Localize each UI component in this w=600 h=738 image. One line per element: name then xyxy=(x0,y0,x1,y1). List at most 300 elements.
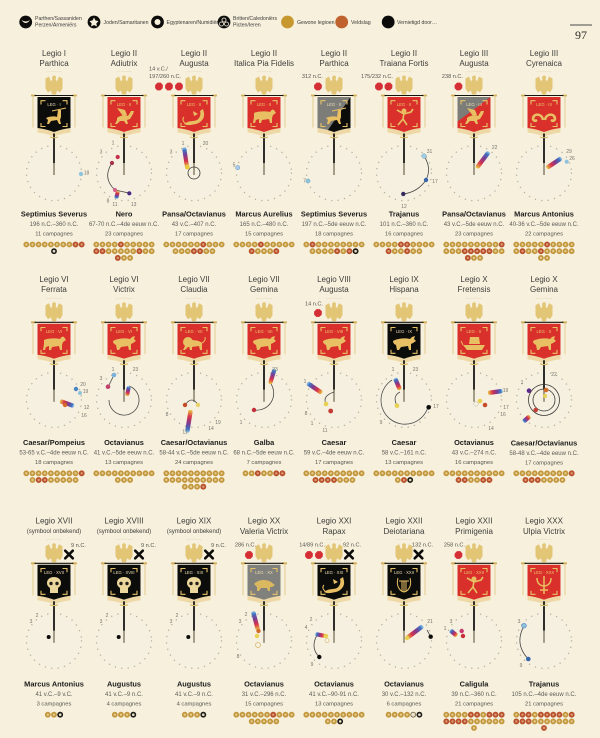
medals xyxy=(185,712,206,718)
heading: Legio II xyxy=(321,49,347,58)
dial: 13 xyxy=(131,202,137,208)
legion: Legio XXII Deiotariana xyxy=(376,516,434,718)
medals xyxy=(166,473,222,490)
dial: 2 xyxy=(245,612,248,618)
medals xyxy=(389,712,422,718)
standard: LEG · II xyxy=(327,102,341,107)
dial: 12 xyxy=(84,405,89,411)
heading: Legio XXX xyxy=(525,516,564,526)
standard xyxy=(446,298,502,427)
emperor: Caesar/Octavianus xyxy=(161,438,227,447)
dates: 16 campagnes xyxy=(385,232,423,238)
standard xyxy=(446,71,502,201)
dial: 2 xyxy=(106,613,109,619)
dial: 1 xyxy=(392,367,395,373)
dates: 31 v.C.–296 n.C. xyxy=(242,692,287,698)
loss markers: 175/232 n.C. xyxy=(361,74,393,80)
dial xyxy=(30,613,51,639)
legion: Legio XXX Ulpia Victrix xyxy=(512,516,577,731)
heading: Legio XVIII xyxy=(104,516,144,526)
legion: Legio VI Victrix xyxy=(94,275,155,480)
standard: LEG · XVIII xyxy=(113,570,135,575)
dates: 21 campagnes xyxy=(455,702,493,708)
dates: 21 campagnes xyxy=(525,702,563,708)
dates: 43 v.C.–5de eeuw n.C. xyxy=(444,222,505,228)
standard xyxy=(166,71,222,201)
standard xyxy=(96,298,152,427)
dial: 3 xyxy=(100,376,103,382)
dates: 16 campagnes xyxy=(455,460,493,466)
dial: 23 xyxy=(413,367,418,373)
legion: Legio I Parthica xyxy=(21,49,89,254)
legion: Legio XX Valeria Victrix xyxy=(235,516,292,721)
medals xyxy=(166,242,222,254)
dial: 5 xyxy=(233,162,236,168)
dates: 13 campagnes xyxy=(105,460,143,466)
heading: Legio II xyxy=(391,49,417,58)
dial: 3 xyxy=(30,619,33,625)
legend item: gold: Gewone legioen xyxy=(297,20,335,26)
standard xyxy=(516,71,572,201)
standard xyxy=(376,298,432,427)
standard: LEG · VI xyxy=(116,329,132,334)
medals xyxy=(516,242,572,258)
standard xyxy=(376,539,432,668)
dial xyxy=(545,149,575,170)
heading: Legio XX xyxy=(248,516,281,526)
dial: 3 xyxy=(170,150,173,156)
loss marker xyxy=(205,543,226,558)
loss markers xyxy=(361,74,393,90)
heading: Adiutrix xyxy=(111,59,137,68)
standard: LEG · I xyxy=(47,102,61,107)
legion: Legio VI Ferrata xyxy=(19,275,89,483)
dial: 17 xyxy=(433,404,439,410)
standard: LEG · XXII xyxy=(464,570,484,575)
dial xyxy=(170,613,190,639)
dial: 4 xyxy=(305,625,308,631)
dates: 101 n.C.–360 n.C. xyxy=(380,222,429,228)
dial: 8 xyxy=(237,654,240,660)
heading: Legio X xyxy=(530,275,558,284)
emperor: Septimius Severus xyxy=(301,210,367,218)
dates: 41 v.C.–9 v.C. xyxy=(35,692,73,698)
dates: 3 campagnes xyxy=(37,702,71,708)
medals xyxy=(443,712,505,728)
standard: LEG · XVII xyxy=(44,570,64,575)
dates: 196 n.C.–360 n.C. xyxy=(30,222,79,228)
loss marker xyxy=(412,542,434,558)
dial xyxy=(521,372,560,424)
standard: LEG · III xyxy=(466,102,482,107)
dial: 21 xyxy=(427,619,433,625)
dates: 40-36 v.C.–5de eeuw n.C. xyxy=(509,222,579,228)
page number xyxy=(570,25,592,42)
heading: Legio VII xyxy=(248,275,280,284)
legion: Legio XXII Primigenia xyxy=(443,516,505,728)
standard xyxy=(96,539,152,668)
medals xyxy=(26,470,85,483)
legend item: Britons: Picten/Ieren xyxy=(233,22,261,28)
dial: 2 xyxy=(176,613,179,619)
standard xyxy=(26,298,82,427)
medals xyxy=(306,715,362,724)
dial: 16 xyxy=(500,412,506,418)
emperor: Septimius Severus xyxy=(21,210,87,218)
dates: 58-44 v.C.–5de eeuw n.C. xyxy=(159,450,229,456)
dial: 3 xyxy=(450,619,453,625)
medals xyxy=(96,473,152,480)
legion: Legio IX Hispana xyxy=(376,275,439,483)
medals xyxy=(513,712,575,731)
dial: 18 xyxy=(84,170,89,176)
medals xyxy=(376,473,432,483)
legion: Legio II Italica xyxy=(233,49,294,254)
legion: Legio X Fretensis xyxy=(446,275,509,483)
dates: 39 n.C.–360 n.C. xyxy=(451,692,497,698)
legion: Legio XVIII xyxy=(96,516,156,718)
emperor: Octavianus xyxy=(384,680,424,688)
dial xyxy=(100,140,137,208)
emperor: Galba xyxy=(254,438,275,447)
dial: 19 xyxy=(83,389,88,395)
standard xyxy=(166,539,222,668)
dates: 197 n.C.–5de eeuw n.C. xyxy=(302,222,367,228)
dial: 9 xyxy=(311,662,314,668)
dates: 13 campagnes xyxy=(315,702,353,708)
emperor: Octavianus xyxy=(244,680,284,688)
dial: 17 xyxy=(432,179,438,185)
dates: 18 campagnes xyxy=(35,460,73,466)
dial: 19 xyxy=(215,420,221,426)
dates: 23 campagnes xyxy=(455,232,493,238)
heading: Legio III xyxy=(530,49,558,58)
dates: 43 v.C.–407 n.C. xyxy=(172,222,217,228)
loss marker xyxy=(305,302,323,317)
dates: 41 v.C.–9 n.C. xyxy=(175,692,213,698)
loss marker xyxy=(135,543,156,558)
dial: 1 xyxy=(112,140,115,146)
standard: LEG · VII xyxy=(185,329,203,334)
legion: Legio III Augusta xyxy=(442,49,506,261)
legend item: Egyptians xyxy=(151,16,221,28)
legend xyxy=(19,16,437,28)
dial: 8 xyxy=(305,411,308,417)
standard xyxy=(96,71,152,201)
heading: Legio XXII xyxy=(456,516,492,526)
legend item: Parthians: Parthen/Sassaniden xyxy=(35,16,82,22)
dial: 1 xyxy=(304,379,307,385)
dial: 23 xyxy=(133,367,138,373)
dial: 2 xyxy=(36,613,39,619)
dates: 4 campagnes xyxy=(107,702,141,708)
standard xyxy=(516,539,572,668)
dial: 29 xyxy=(566,149,572,155)
standard: LEG · XXII xyxy=(394,570,414,575)
medals xyxy=(446,242,505,261)
loss marker xyxy=(302,74,323,90)
standard: LEG · XXX xyxy=(534,570,554,575)
emperor: Trajanus xyxy=(529,680,559,688)
heading: Legio II xyxy=(111,49,137,58)
standard xyxy=(376,71,432,201)
dates: 18 campagnes xyxy=(315,232,353,238)
standard: LEG · II xyxy=(117,102,131,107)
dial: 8 xyxy=(166,412,169,418)
standard: LEG · XX xyxy=(255,570,273,575)
dial: 8 xyxy=(107,198,110,204)
legend item: black xyxy=(382,16,437,28)
dial: 23 xyxy=(272,367,278,373)
legend item: Jews xyxy=(88,16,149,28)
medals xyxy=(236,712,292,721)
standard xyxy=(446,539,502,668)
heading: Legio III xyxy=(460,49,488,58)
dates: 11 campagnes xyxy=(35,232,73,238)
dates: 17 campagnes xyxy=(315,460,353,466)
emperor: Trajanus xyxy=(389,210,419,218)
legend item: Parthians: Perzen/Armeniërs xyxy=(35,22,77,28)
heading: Legio VII xyxy=(178,275,210,284)
heading: Legio VIII xyxy=(317,275,351,284)
emperor: Caesar xyxy=(392,438,416,447)
standard: LEG · II xyxy=(397,102,411,107)
medals xyxy=(306,473,362,483)
dial xyxy=(170,141,208,179)
dates: 59 v.C.–4de eeuw n.C. xyxy=(304,450,365,456)
dial: 16 xyxy=(81,413,87,419)
dial xyxy=(100,613,121,639)
emperor: Caesar/Pompeius xyxy=(23,438,85,447)
medals xyxy=(446,473,502,483)
dates: 30 v.C.–132 n.C. xyxy=(382,692,427,698)
standard: LEG · IX xyxy=(396,329,412,334)
heading: Ulpia Victrix xyxy=(523,527,565,536)
emperor: Marcus Aurelius xyxy=(235,210,293,218)
legion: Legio X Gemina xyxy=(509,275,579,483)
heading: Rapax xyxy=(322,527,346,536)
dial: 1 xyxy=(182,141,185,147)
dates: 15 campagnes xyxy=(245,702,283,708)
heading: Claudia xyxy=(180,285,208,294)
standard: LEG · VIII xyxy=(325,329,343,334)
emperor: Nero xyxy=(116,210,133,218)
standard xyxy=(306,539,362,668)
legend item: Parthians xyxy=(19,16,82,28)
dial xyxy=(303,178,310,184)
dates: 15 campagnes xyxy=(245,232,283,238)
standard xyxy=(236,539,292,668)
legend item: orange xyxy=(335,16,371,28)
legend item: Jews: Joden/Samaritanen xyxy=(104,20,149,26)
dial xyxy=(305,617,329,668)
standard xyxy=(236,298,292,427)
medals xyxy=(516,470,575,483)
dates: 6 campagnes xyxy=(387,702,421,708)
dates: 4 campagnes xyxy=(177,702,211,708)
dial: 19 xyxy=(503,388,508,394)
medals xyxy=(26,242,85,254)
dial xyxy=(166,400,221,436)
heading: Legio XVII xyxy=(36,516,72,526)
legend item: black: Vernietigd door… xyxy=(397,20,437,26)
dial xyxy=(304,379,334,434)
emperor: Caesar/Octavianus xyxy=(511,438,577,448)
legion: Legio III Cyrenaica xyxy=(509,49,579,258)
legend item: Egyptians: Egyptenaren/Numidiërs xyxy=(166,20,221,26)
dial xyxy=(237,611,261,660)
dates: 24 campagnes xyxy=(175,460,213,466)
loss marker: 9 n.C. xyxy=(71,543,86,549)
dates: 53-65 v.C.–4de eeuw n.C. xyxy=(19,450,89,456)
loss markers xyxy=(299,542,361,559)
dial xyxy=(79,170,89,176)
dial: 11 xyxy=(322,428,328,434)
emperor: Marcus Antonius xyxy=(514,210,574,218)
loss marker: 286 n.C. xyxy=(235,542,256,548)
emperor: Octavianus xyxy=(454,438,494,447)
heading: Legio I xyxy=(42,49,66,58)
dial xyxy=(475,145,498,169)
loss marker: 312 n.C. xyxy=(302,74,323,80)
heading: Italica Pia Fidelis xyxy=(234,59,294,68)
heading: Legio IX xyxy=(389,275,419,284)
dates: 41 v.C.–9 n.C. xyxy=(105,692,143,698)
legend item: orange: Veldslag xyxy=(351,20,371,26)
heading: Fretensis xyxy=(458,285,490,294)
dates: 17 campagnes xyxy=(525,460,563,466)
loss marker xyxy=(235,542,256,559)
loss marker xyxy=(444,542,465,559)
heading: Deiotariana xyxy=(384,527,425,536)
dial: 20 xyxy=(203,141,208,147)
dial: 2 xyxy=(310,617,313,623)
dial: 14 xyxy=(208,426,214,432)
standard: LEG · VII xyxy=(255,329,273,334)
heading: Ferrata xyxy=(41,285,67,294)
heading: (symbool onbekend) xyxy=(27,529,81,535)
dates: 43 v.C.–274 n.C. xyxy=(452,450,497,456)
standard: LEG · XXI xyxy=(325,570,343,575)
loss markers xyxy=(149,66,183,90)
loss marker: 258 n.C. xyxy=(444,542,465,548)
dial: 1 xyxy=(112,367,115,373)
dial: 11 xyxy=(112,202,118,208)
dates: 68 n.C.–5de eeuw n.C. xyxy=(233,450,295,456)
dial: 3 xyxy=(100,619,103,625)
heading: Victrix xyxy=(113,285,135,294)
medals xyxy=(246,470,285,476)
dial xyxy=(474,388,509,432)
legion: Legio II Adiutrix xyxy=(89,49,159,261)
dial: 3 xyxy=(170,619,173,625)
dial: 22 xyxy=(492,145,498,151)
loss marker: 14 n.C. xyxy=(305,302,323,308)
heading: Valeria Victrix xyxy=(240,527,288,536)
dial: 31 xyxy=(427,149,432,155)
dial xyxy=(233,162,240,170)
legend item: gold xyxy=(281,16,335,28)
standard xyxy=(306,71,362,201)
heading: Legio XIX xyxy=(177,516,212,526)
standard xyxy=(26,71,82,201)
dial xyxy=(59,382,89,419)
legion: Legio II Traiana Fortis xyxy=(361,49,438,254)
dial: 14 xyxy=(488,426,494,432)
dates: 58-48 v.C.–4de eeuw n.C. xyxy=(509,451,579,457)
heading: Cyrenaica xyxy=(526,59,563,68)
dial: 1 xyxy=(444,626,447,632)
standard xyxy=(166,298,222,427)
heading: Legio VI xyxy=(109,275,139,284)
dial: 22 xyxy=(551,372,557,378)
loss marker: 132 n.C. xyxy=(412,542,434,548)
legion: Legio XVII xyxy=(24,516,86,718)
dates: 22 campagnes xyxy=(525,232,563,238)
heading: Traiana Fortis xyxy=(379,59,429,68)
standard: LEG · X xyxy=(467,329,482,334)
dial xyxy=(240,367,278,426)
heading: Gemina xyxy=(250,285,279,294)
dial: 1 xyxy=(240,420,243,426)
standard: LEG · X xyxy=(537,329,552,334)
heading: Legio II xyxy=(181,49,207,58)
heading: Legio XXII xyxy=(386,516,422,526)
dial: 17 xyxy=(503,405,509,411)
dial xyxy=(401,149,438,210)
dial: 3 xyxy=(518,619,521,625)
heading: Gemina xyxy=(530,285,559,294)
dial: 11 xyxy=(182,430,188,436)
emperor: Caesar xyxy=(322,438,346,447)
standard: LEG · II xyxy=(257,102,271,107)
heading: Augusta xyxy=(319,285,349,294)
emperor: Pansa/Octavianus xyxy=(162,210,226,218)
dial: 9 xyxy=(520,663,523,669)
loss markers: 14/89 n.C. xyxy=(299,542,325,548)
heading: Parthica xyxy=(319,59,349,68)
dates: 23 campagnes xyxy=(105,232,143,238)
legion: Legio II Parthica xyxy=(301,49,367,254)
standard: LEG · II xyxy=(187,102,201,107)
dial: 1 xyxy=(521,380,524,386)
emperor: Caligula xyxy=(460,680,489,688)
heading: Parthica xyxy=(39,59,69,68)
heading: Legio VI xyxy=(39,275,69,284)
loss markers: 14 v.C./ xyxy=(149,66,168,72)
medals xyxy=(93,242,152,261)
heading: (symbool onbekend) xyxy=(97,529,151,535)
standard: LEG · III xyxy=(536,102,552,107)
dates: 105 n.C.–4de eeuw n.C. xyxy=(512,692,577,698)
heading: Legio X xyxy=(460,275,488,284)
heading: Augusta xyxy=(459,59,489,68)
medals xyxy=(236,242,292,254)
heading: Legio II xyxy=(251,49,277,58)
dial: 12 xyxy=(401,204,407,210)
legend item: Britons xyxy=(218,16,278,28)
emperor: Octavianus xyxy=(104,438,144,447)
dates: 58 v.C.–161 n.C. xyxy=(382,450,427,456)
loss marker xyxy=(442,74,463,90)
emperor: Augustus xyxy=(107,680,141,688)
dial: 3 xyxy=(239,619,242,625)
dial: 7 xyxy=(303,178,306,184)
heading: Legio XXI xyxy=(317,516,351,526)
legend item: Britons: Britten/Caledoniërs xyxy=(233,16,278,22)
heading: Primigenia xyxy=(455,527,493,536)
loss marker xyxy=(65,543,86,558)
